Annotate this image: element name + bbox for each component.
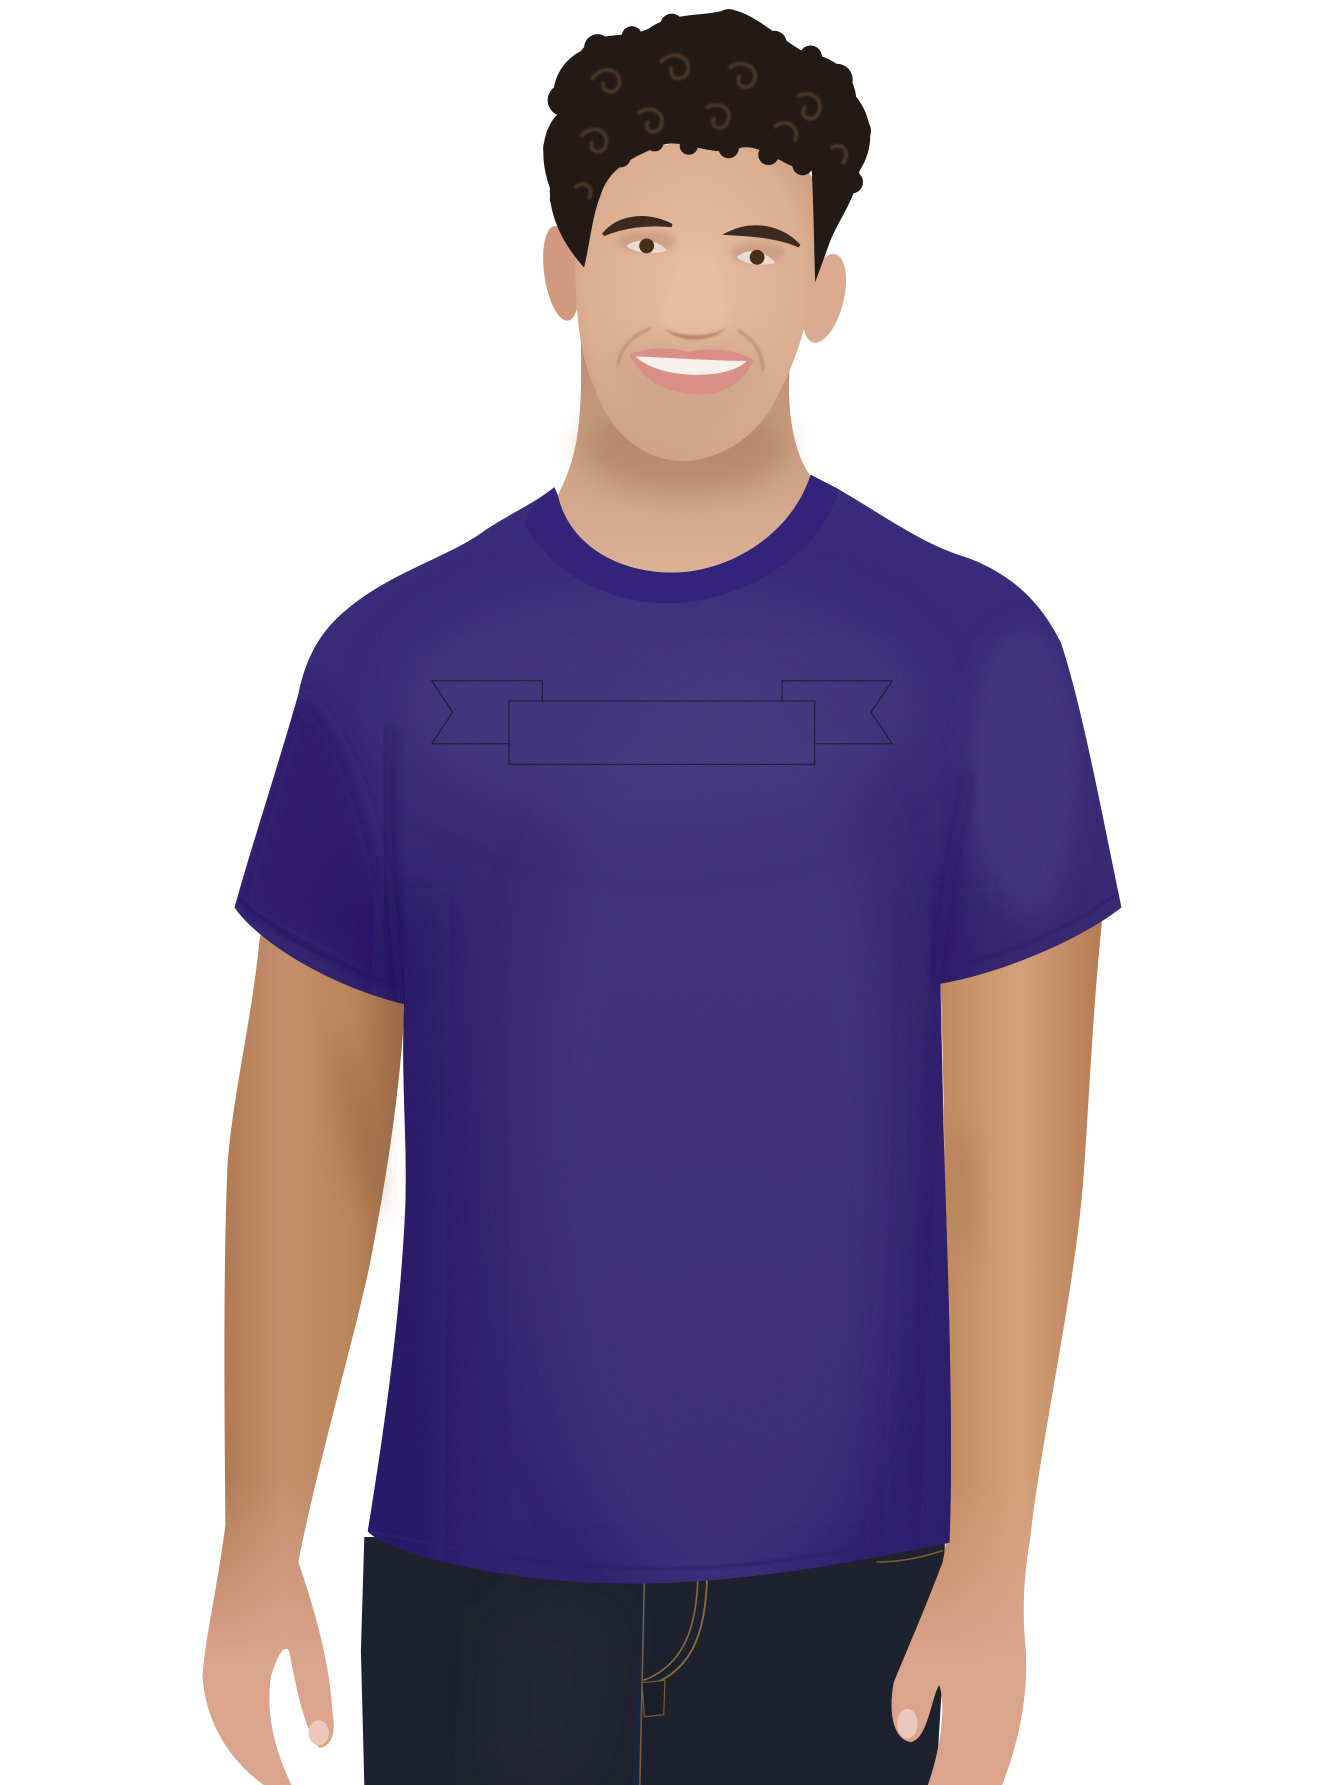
hair curl highlights xyxy=(575,55,846,199)
stubble xyxy=(603,339,765,450)
collar xyxy=(526,475,839,603)
left ribbon tail xyxy=(432,681,542,744)
ears xyxy=(538,224,854,347)
jeans xyxy=(361,1537,945,1785)
eye sockets xyxy=(617,231,784,263)
mouth xyxy=(630,348,754,395)
left arm and hand xyxy=(203,877,406,1785)
right arm and hand xyxy=(892,899,1104,1785)
eyes xyxy=(626,239,775,265)
ribbon centre panel xyxy=(509,701,815,764)
t-shirt xyxy=(228,467,1127,1617)
eyebrows xyxy=(603,218,799,246)
nose xyxy=(660,256,729,336)
person photo xyxy=(203,9,1127,1785)
product mockup: man wearing purple t-shirt xyxy=(202,9,1122,1785)
face xyxy=(575,141,815,461)
neck xyxy=(558,330,811,573)
smile creases xyxy=(618,328,763,371)
right ribbon tail xyxy=(782,681,892,744)
ribbon banner outline xyxy=(432,681,892,764)
curly hair xyxy=(543,9,871,282)
